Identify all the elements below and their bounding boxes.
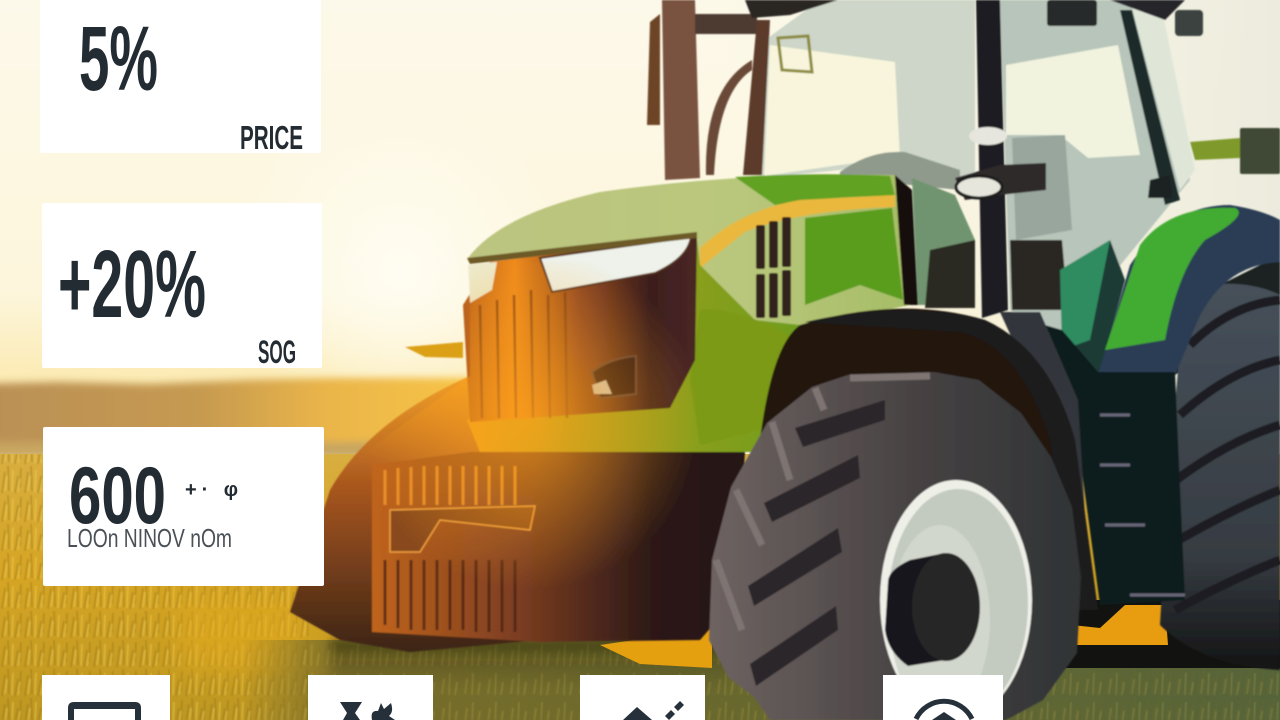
icon: circle badge	[916, 701, 972, 720]
stat card: 600: LOOn NINOV nOm	[67, 523, 232, 553]
stat card: 5% price: PRICE	[240, 119, 303, 156]
stat card: 600: 600	[69, 451, 166, 541]
front fender	[745, 309, 1098, 610]
body side panel	[467, 240, 800, 452]
stat card: +20% SOG: SOG	[258, 334, 296, 370]
wheel rim	[880, 480, 1032, 720]
rear right tire	[1175, 255, 1280, 375]
icon card: hourglass and plant	[308, 675, 433, 720]
icon card: tablet	[42, 675, 170, 720]
rear fender	[1098, 205, 1280, 375]
tractor illustration	[290, 0, 1280, 720]
stat card: +20% SOG: +20%	[58, 231, 206, 338]
front grille	[463, 236, 697, 422]
stat card: 5% price: 5%	[79, 8, 158, 110]
stat card: 600: +· φ	[185, 479, 238, 501]
icon: triangle and mark	[623, 701, 684, 720]
sun glow on tractor	[295, 262, 700, 640]
icon: hourglass and plant	[340, 702, 395, 720]
left rear tire	[290, 376, 540, 652]
icon card: circle	[883, 675, 1003, 720]
icon: tablet outline	[68, 702, 141, 720]
wheel hub	[885, 553, 945, 666]
cab glass	[762, 0, 975, 190]
side mirror and lights	[1047, 0, 1097, 26]
engine hood	[468, 175, 910, 330]
icon card: triangle	[580, 675, 705, 720]
stat card: +20% SOG	[42, 203, 322, 370]
stat card: 5% price	[40, 0, 321, 156]
stat card: 600	[43, 427, 324, 586]
hood vents	[756, 217, 791, 318]
exhaust pipe	[662, 0, 700, 180]
lower chassis	[372, 452, 745, 642]
cab pillars	[743, 20, 770, 175]
chassis between wheels	[1000, 312, 1185, 605]
headlights	[540, 237, 691, 292]
front wheel	[709, 372, 1081, 720]
tow bracket	[390, 506, 535, 552]
